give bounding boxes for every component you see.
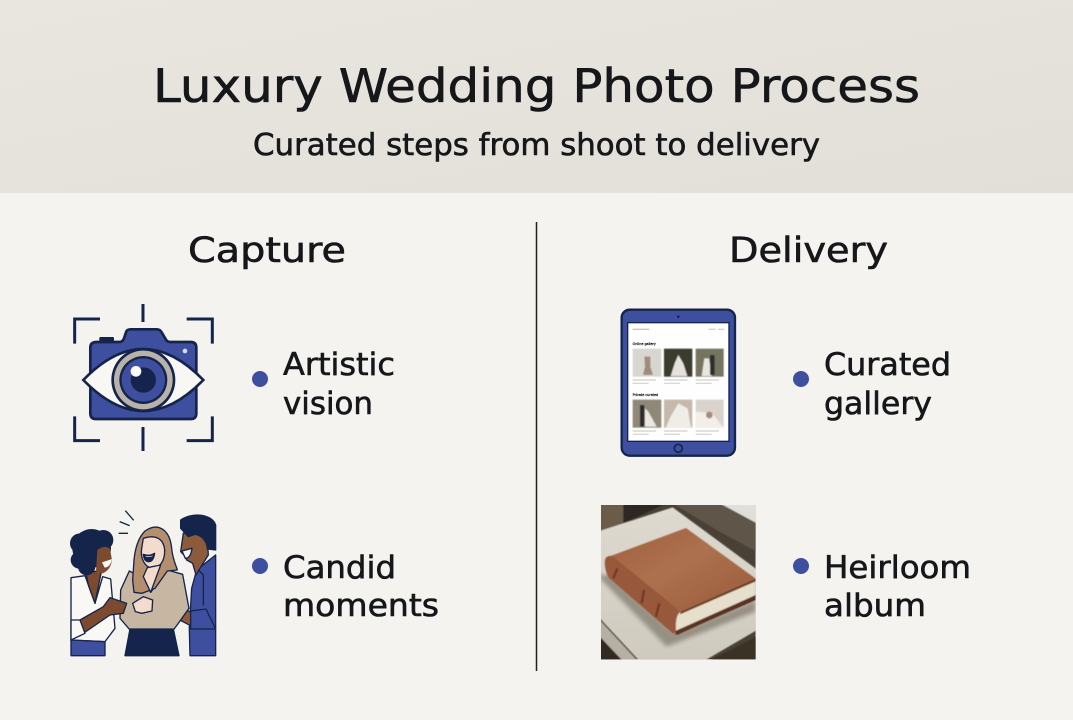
panel: capture [70, 231, 439, 656]
photo: leather album [597, 502, 760, 663]
heading: delivery: Delivery [729, 231, 888, 271]
middle woman [120, 527, 189, 656]
title: Luxury Wedding Photo Process [153, 59, 920, 113]
label: artistic vision: Artistic [283, 347, 395, 383]
icon: tablet gallery [622, 310, 735, 456]
excitement marks [119, 511, 134, 533]
label: curated gallery: Curated [824, 347, 951, 383]
subtitle: Curated steps from shoot to delivery [253, 128, 820, 163]
label: heirloom album [824, 550, 971, 624]
icon: camera with eye [75, 304, 212, 451]
bullet: candid moments [252, 558, 268, 574]
icon: tablet gallery: Online gallery [633, 342, 656, 346]
heading: capture: Capture [188, 231, 346, 271]
label: heirloom album: Heirloom [824, 550, 971, 586]
label: curated gallery [824, 347, 951, 422]
label: candid moments [283, 550, 439, 624]
right man [154, 515, 216, 656]
center divider [536, 222, 538, 671]
label: curated gallery: gallery [824, 386, 932, 422]
bullet: heirloom album [793, 558, 809, 574]
label: candid moments: moments [283, 588, 439, 624]
label: artistic vision: vision [283, 386, 373, 422]
illustration: laughing friends [70, 511, 216, 656]
icon: tablet gallery: Private curated [633, 393, 658, 397]
bullet: artistic vision [252, 371, 268, 387]
panel: delivery [597, 231, 971, 663]
label: artistic vision [283, 347, 395, 422]
label: candid moments: Candid [283, 550, 396, 586]
label: heirloom album: album [824, 588, 926, 624]
header band [0, 0, 1073, 193]
left woman [70, 529, 127, 656]
bullet: curated gallery [793, 371, 809, 387]
gallery photos [633, 349, 724, 428]
